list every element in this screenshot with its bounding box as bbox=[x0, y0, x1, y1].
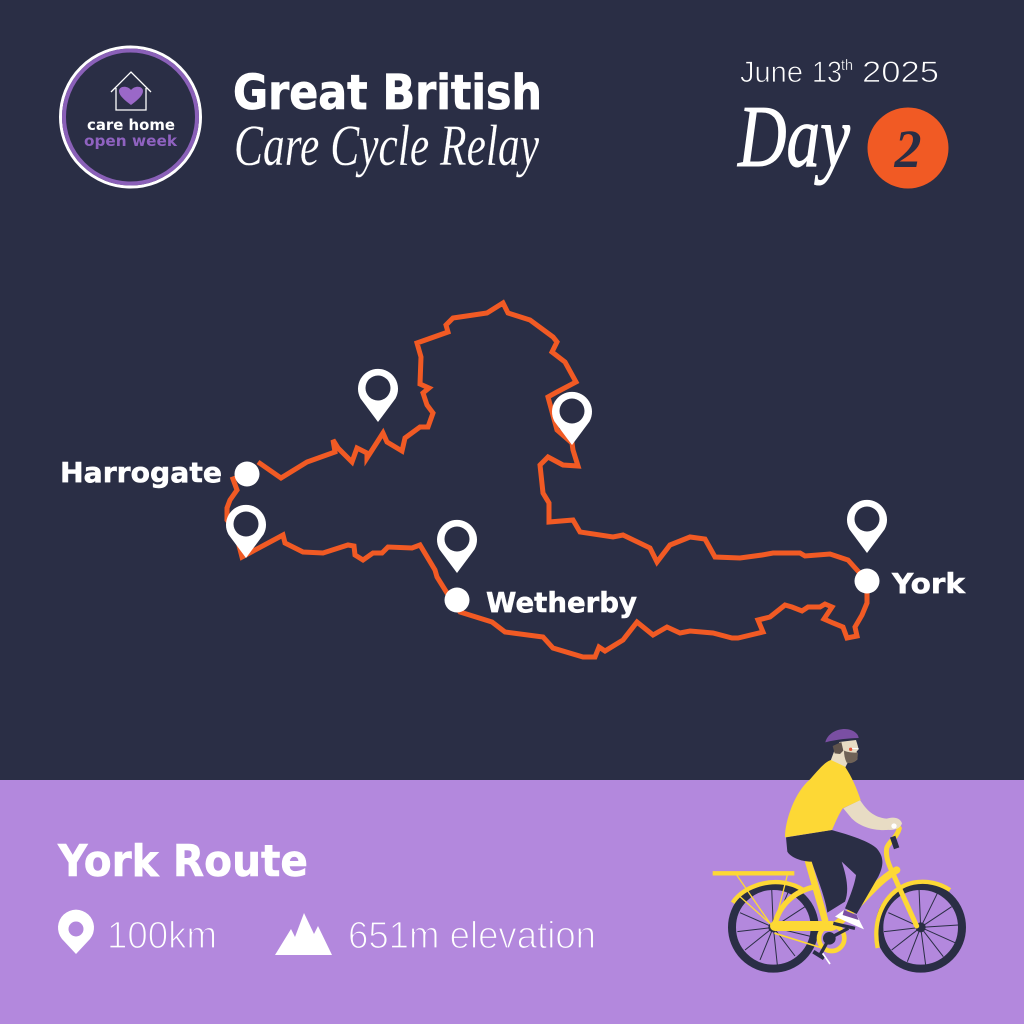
date: 2025 bbox=[862, 56, 939, 89]
helmet bbox=[825, 729, 859, 742]
stop: York bbox=[854, 567, 966, 600]
elevation: 651m elevation bbox=[348, 915, 596, 957]
title: Great British bbox=[233, 65, 542, 121]
stop: York: York bbox=[891, 567, 966, 600]
rack bbox=[713, 873, 794, 927]
pin 1 bbox=[358, 369, 398, 422]
date bbox=[740, 56, 939, 89]
route name: York Route bbox=[57, 836, 308, 887]
arm bbox=[843, 800, 902, 830]
front wheel bbox=[879, 886, 962, 969]
title: Care Cycle Relay bbox=[234, 113, 539, 178]
head bbox=[839, 740, 859, 763]
drivetrain bbox=[813, 837, 897, 964]
trousers bbox=[786, 830, 882, 914]
face detail bbox=[849, 748, 859, 751]
stop: Wetherby: Wetherby bbox=[486, 586, 637, 619]
day badge: Day bbox=[737, 89, 851, 186]
frame bbox=[775, 828, 917, 951]
bottom panel bbox=[0, 780, 1024, 1024]
neck bbox=[831, 750, 849, 767]
date: 13 bbox=[812, 56, 842, 89]
shoes bbox=[835, 910, 864, 929]
hand highlight bbox=[891, 823, 897, 829]
date: th bbox=[841, 57, 853, 74]
logo: care home open week bbox=[60, 47, 200, 187]
distance: 100km bbox=[107, 915, 217, 957]
stop: Harrogate: Harrogate bbox=[60, 456, 222, 489]
pin 3 bbox=[226, 505, 266, 558]
logo: care home open week: open week bbox=[84, 132, 178, 150]
pin 5 bbox=[847, 500, 887, 553]
day badge bbox=[737, 89, 948, 188]
day badge: 2 bbox=[894, 119, 922, 179]
t-shirt bbox=[785, 760, 861, 837]
rear wheel bbox=[732, 886, 815, 969]
fenders bbox=[733, 882, 950, 948]
cyclist bbox=[713, 729, 962, 969]
route map bbox=[227, 303, 867, 657]
pin 4 bbox=[437, 520, 477, 573]
date: June bbox=[740, 56, 803, 89]
pin 2 bbox=[552, 392, 592, 445]
beard bbox=[844, 751, 858, 763]
logo: care home open week: care home bbox=[87, 116, 175, 134]
hair bbox=[833, 742, 843, 754]
icon: mountain bbox=[275, 913, 332, 955]
icon: distance pin bbox=[58, 910, 94, 954]
title bbox=[233, 65, 542, 178]
